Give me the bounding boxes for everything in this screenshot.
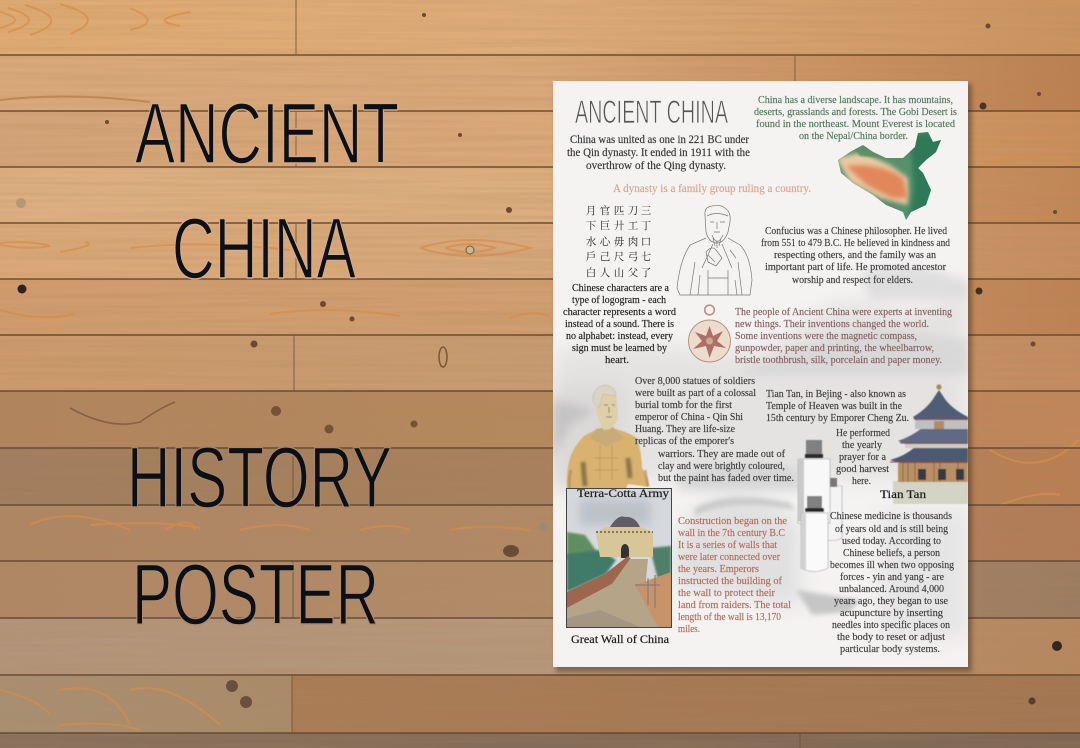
text: Qin dynasty intro: China was united as one in 221 BC under [570,134,749,146]
icon: medicine bottles [798,440,842,572]
text: Tian Tan: He performed [836,428,891,439]
text: Great Wall facts [678,516,791,635]
large headline: Ancient China History Poster [127,86,399,643]
text: Great Wall facts: instructed the building of [678,576,782,587]
caption: Terra-Cotta Army: Terra-Cotta Army [577,488,669,500]
text: Great Wall facts: Construction began on the [678,516,787,527]
poster sheet [553,81,972,672]
text: Chinese medicine: needles into specific places on [832,620,951,631]
Chinese character grid: 下 [586,218,597,233]
text: Chinese medicine [830,511,955,655]
Chinese character grid: 白 [586,265,596,280]
text: terracotta soldiers: warriors. They are made out of [658,449,785,460]
text: Tian Tan: 15th century by Emporer Cheng Zu. [766,413,909,424]
Chinese character grid: 丁 [641,218,651,233]
text: Great Wall facts: the wall to protect their [678,588,775,599]
text: Great Wall facts: miles. [678,624,700,635]
text: Chinese medicine: Chinese beliefs, a person [843,548,941,559]
text: terracotta soldiers: replicas of the emporer's [635,436,734,447]
text: terracotta soldiers: Over 8,000 statues of soldiers [635,376,755,387]
Chinese character grid: 工 [628,218,639,233]
large headline: Ancient China History Poster: CHINA [172,201,356,297]
text: Great Wall facts: length of the wall is 13,170 [678,612,781,623]
text: Great Wall facts: land from raiders. The total [678,600,791,611]
text: Chinese medicine: forces - yin and yang - are [840,572,944,583]
text: Chinese characters: sign must be learned by [572,343,668,354]
Chinese character grid: 匹 [614,203,625,218]
Chinese character grid: 弓 [628,249,638,264]
text: terracotta soldiers [635,376,794,484]
Chinese character grid: 父 [628,265,639,280]
Chinese character grid: 刀 [628,203,638,218]
text: Chinese medicine: unbalanced. Around 4,000 [839,584,944,595]
Chinese character grid: 口 [641,234,651,249]
text: Chinese characters: heart. [605,355,629,366]
large headline: Ancient China History Poster: ANCIENT [135,86,399,182]
text: Confucius: important part of life. He promoted ancestor [765,262,946,273]
text: Confucius: worship and respect for elders. [792,275,913,286]
text: Qin dynasty intro [567,134,750,172]
text: Chinese medicine: used today. According to [842,536,941,547]
text: Chinese characters: character represents a word [563,307,677,318]
text: inventions: new things. Their inventions changed the world. [735,319,929,330]
text: Chinese medicine: becomes ill when two opposing [830,560,955,571]
text: Tian Tan: Tian Tan, in Bejing - also known as [766,389,906,400]
callout: dynasty definition: A dynasty is a family group ruling a country. [613,183,811,195]
text: inventions: The people of Ancient China were experts at inventing [735,307,953,318]
text: Tian Tan: good harvest [836,464,889,475]
text: landscape of China: found in the northeast. Mount Everest is located [756,119,956,130]
icon: watercolour map of China [838,132,941,220]
text: Chinese characters: type of logogram - each [572,295,667,306]
text: terracotta soldiers: were built as part of a colossal [635,388,756,399]
text: terracotta soldiers: burial tomb for the first [635,400,732,411]
text: Chinese medicine: acupuncture by inserting [840,608,944,619]
text: Tian Tan [766,389,909,487]
text: Chinese characters [563,283,677,366]
Chinese character grid: 官 [600,203,611,218]
text: landscape of China [754,95,957,142]
text: terracotta soldiers: Huang. They are life-size [635,424,735,435]
text: Qin dynasty intro: overthrow of the Qing dynasty. [586,160,726,172]
text: landscape of China: China has a diverse landscape. It has mountains, [758,95,953,106]
text: Chinese medicine: Chinese medicine is thousands [830,511,952,522]
text: Tian Tan: prayer for a [839,452,886,463]
Chinese character grid: 月 [586,203,596,218]
text: Confucius: from 551 to 479 B.C. He believed in kindness and [761,238,951,249]
text: Tian Tan: here. [852,476,871,487]
Chinese character grid: 戶 [586,249,596,264]
icon: compass [688,305,730,362]
Chinese character grid: 肉 [628,234,638,249]
text: Chinese medicine: particular body systems. [840,644,940,655]
text: terracotta soldiers: but the paint has faded over time. [658,473,794,484]
text: Great Wall facts: were later connected over [678,552,780,563]
text: inventions: bristle toothbrush, silk, porcelain and paper money. [735,355,942,366]
Chinese character grid: 巨 [600,218,610,233]
text: inventions: Some inventions were the magnetic compass, [735,331,917,342]
Chinese character grid: 人 [600,265,611,280]
text: inventions [735,307,953,366]
text: Confucius [761,226,951,286]
text: Confucius: Confucius was a Chinese philosopher. He lived [765,226,948,237]
icon: Confucius line drawing [677,205,752,295]
text: terracotta soldiers: emperor of China - Qin Shi [635,412,743,423]
text: Tian Tan: the yearly [842,440,883,451]
Chinese character grid: 了 [641,265,651,280]
text: inventions: gunpowder, paper and printing, the wheelbarrow, [735,343,934,354]
text: terracotta soldiers: clay and were brightly coloured, [658,461,785,472]
poster title: ANCIENT CHINA [575,94,728,130]
Chinese character grid: 己 [600,249,610,264]
Chinese character grid: 七 [641,249,652,264]
Chinese character grid: 心 [600,234,611,249]
text: Qin dynasty intro: the Qin dynasty. It ended in 1911 with the [567,147,750,159]
text: Great Wall facts: It is a series of walls that [678,540,777,551]
Chinese character grid: 三 [641,203,652,218]
text: Chinese medicine: of years old and is still being [835,524,949,535]
caption: Great Wall of China: Great Wall of China [571,634,669,646]
Chinese character grid: 水 [586,234,597,249]
large headline: Ancient China History Poster: POSTER [132,547,379,643]
text: landscape of China: on the Nepal/China border. [799,131,908,142]
text: Chinese medicine: the body to reset or adjust [837,632,945,643]
Chinese character grid: 山 [614,265,624,280]
text: Chinese medicine: years ago, they began to use [834,596,948,607]
text: Great Wall facts: the years. Emperors [678,564,759,575]
text: Chinese characters: Chinese characters are a [572,283,669,294]
text: Confucius: respecting others, and the family was an [774,250,937,261]
Chinese character grid [586,203,652,280]
Chinese character grid: 毋 [614,234,625,249]
icon: Temple of Heaven [890,384,968,504]
caption: Tian Tan: Tian Tan [880,489,926,501]
text: Chinese characters: instead of a sound. There is [565,319,674,330]
text: Chinese characters: no alphabet: instead, every [566,331,674,342]
Chinese character grid: 廾 [614,218,625,233]
image: Great Wall watercolour [566,488,672,628]
icon: terracotta soldier [567,385,649,497]
text: Tian Tan: Temple of Heaven was built in the [766,401,902,412]
large headline: Ancient China History Poster: HISTORY [127,430,392,526]
text: landscape of China: deserts, grasslands and forests. The Gobi Desert is [754,107,957,118]
text: Great Wall facts: wall in the 7th century B.C [678,528,785,539]
Chinese character grid: 尺 [614,249,624,264]
